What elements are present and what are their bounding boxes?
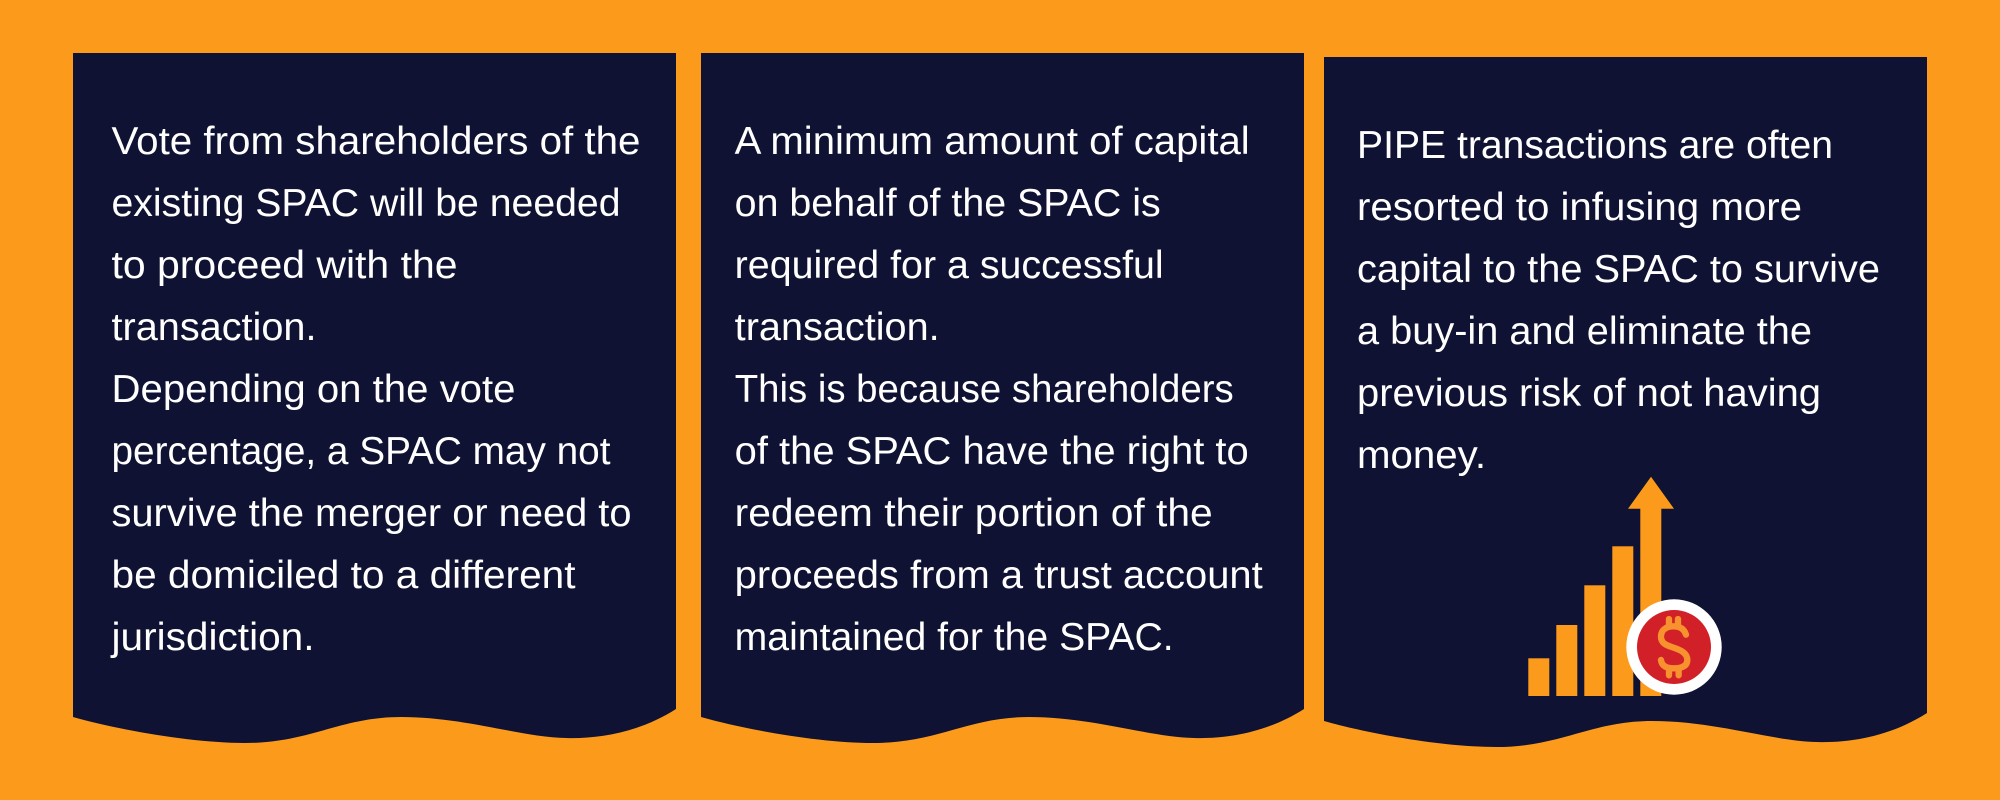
rising bars: [1528, 546, 1633, 696]
panel: shareholder vote: [73, 53, 676, 743]
text block: shareholder vote: jurisdiction.: [110, 616, 315, 659]
text block: minimum capital: redeem their portion of the: [735, 492, 1213, 535]
text block: PIPE transactions: PIPE transactions are often: [1357, 124, 1833, 167]
text block: minimum capital: of the SPAC have the right to: [735, 430, 1249, 473]
icon: rising bar chart with arrow and dollar coin: [1528, 477, 1722, 696]
text block: PIPE transactions: previous risk of not having: [1357, 372, 1821, 415]
text block: PIPE transactions: capital to the SPAC to survive: [1357, 248, 1880, 291]
text block: minimum capital: required for a successful: [735, 244, 1164, 287]
panel: PIPE transactions: [1324, 57, 1927, 747]
panel: minimum capital: [701, 53, 1304, 743]
text block: shareholder vote: Vote from shareholders of the: [112, 120, 640, 163]
text block: shareholder vote: be domiciled to a different: [112, 554, 576, 597]
text block: PIPE transactions: a buy-in and eliminate the: [1357, 310, 1812, 353]
panel background: wave-bottom card: [73, 53, 676, 743]
text block: shareholder vote: survive the merger or need to: [112, 492, 632, 535]
text block: PIPE transactions: resorted to infusing more: [1357, 186, 1802, 229]
text block: minimum capital: [735, 120, 1263, 659]
text block: shareholder vote: percentage, a SPAC may not: [112, 430, 611, 473]
text block: minimum capital: maintained for the SPAC.: [735, 616, 1174, 659]
dollar coin: [1626, 599, 1722, 695]
text block: PIPE transactions: [1357, 124, 1880, 477]
panel background: wave-bottom card: [1324, 57, 1927, 747]
text block: shareholder vote: to proceed with the: [112, 244, 458, 287]
text block: shareholder vote: transaction.: [112, 306, 316, 349]
text block: shareholder vote: existing SPAC will be needed: [112, 182, 620, 225]
panel background: wave-bottom card: [701, 53, 1304, 743]
text block: minimum capital: on behalf of the SPAC is: [735, 182, 1161, 225]
text block: PIPE transactions: money.: [1357, 434, 1486, 477]
text block: minimum capital: proceeds from a trust account: [735, 554, 1263, 597]
text block: minimum capital: A minimum amount of capital: [735, 120, 1250, 163]
text block: minimum capital: transaction.: [735, 306, 940, 349]
text block: shareholder vote: [110, 120, 640, 659]
text block: shareholder vote: Depending on the vote: [112, 368, 516, 411]
arrow: [1628, 477, 1674, 696]
text block: minimum capital: This is because shareholders: [735, 368, 1234, 411]
